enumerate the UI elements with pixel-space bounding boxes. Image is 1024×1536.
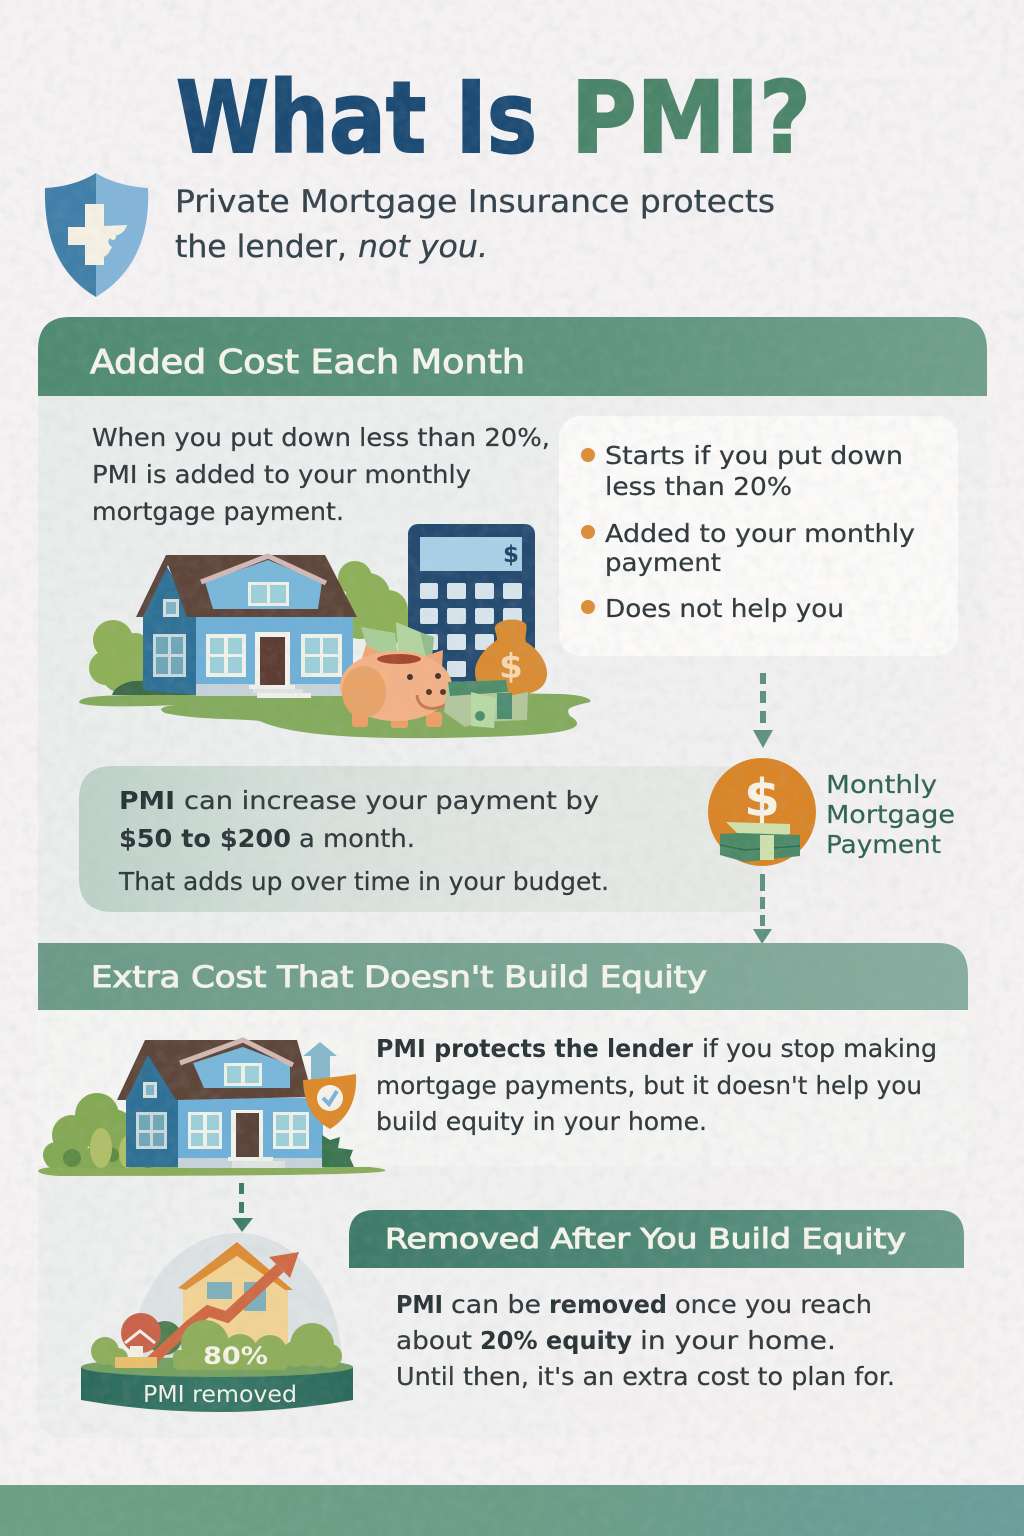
calculator: $ (503, 542, 519, 568)
callout: payment increase: That adds up over time in your budget. (118, 867, 609, 896)
callout: bullet list (559, 416, 958, 656)
right bush (336, 561, 414, 648)
heading bar: extra cost: Extra Cost That Doesn't Build Equity (91, 960, 707, 994)
icon: shield with cross (45, 173, 148, 297)
text block: when you put down: When you put down less than 20%, (92, 423, 550, 452)
illustration: house with shield (38, 1040, 385, 1176)
calculator (408, 524, 535, 694)
subtitle: the lender, (175, 229, 347, 265)
house (136, 555, 357, 698)
plank (115, 1357, 157, 1368)
callout: payment increase: $50 to $200 (119, 824, 291, 853)
text block: protects the lender: mortgage payments, but it doesn't help you (376, 1071, 922, 1100)
grass (79, 692, 590, 738)
label: monthly mortgage payment: Monthly (826, 770, 937, 799)
piggy bank (340, 645, 452, 728)
text block: when you put down: PMI is added to your monthly (92, 460, 471, 489)
heading bar: added cost each month (38, 317, 987, 396)
title: What Is (176, 61, 537, 176)
subtitle (175, 184, 775, 265)
heading bar: removed after (349, 1210, 964, 1268)
right plant (322, 1135, 354, 1167)
bullet: starts if: Starts if you put down (605, 441, 903, 470)
yellow house (178, 1242, 293, 1350)
growth arrow (150, 1252, 299, 1362)
panel: added cost each month (38, 317, 987, 944)
heading bar: added cost each month: Added Cost Each Month (90, 342, 525, 381)
dome (130, 1233, 342, 1365)
illustration: house, calculator, piggy bank, money (79, 524, 590, 738)
title (176, 61, 811, 176)
callout: payment increase: can increase your payment by (184, 786, 599, 815)
subtitle: not you. (358, 229, 488, 265)
text panel background (38, 1010, 968, 1166)
callout: payment increase (79, 766, 762, 912)
text block: can be removed: PMI (396, 1290, 443, 1319)
money bag (475, 620, 547, 695)
icon: monthly mortgage payment coin: $ (744, 769, 780, 829)
arrow: house to equity illustration (232, 1183, 253, 1232)
text block: can be removed: can be (451, 1290, 541, 1319)
text block: can be removed: removed (549, 1290, 667, 1319)
panel: main background (38, 317, 987, 1438)
text block: when you put down (92, 423, 550, 526)
text block: protects the lender: PMI protects the lender (376, 1034, 694, 1063)
callout: payment increase: PMI (119, 786, 175, 815)
subtitle: Private Mortgage Insurance protects (175, 184, 775, 220)
bushes (91, 1320, 342, 1370)
text block: can be removed (396, 1290, 895, 1391)
text block: can be removed: once you reach (675, 1290, 872, 1319)
bushes (43, 1093, 141, 1168)
label: monthly mortgage payment: Payment (826, 830, 941, 859)
label: monthly mortgage payment: Mortgage (826, 800, 955, 829)
bullet: does not help: Does not help you (605, 594, 844, 623)
heading bar: extra cost (38, 943, 968, 1010)
platform (81, 1357, 353, 1412)
arrow: coin to next section (753, 874, 772, 944)
bullet: added to payment (581, 519, 915, 577)
callout: payment increase: a month. (299, 824, 415, 853)
panel: extra cost that doesn't build equity (38, 943, 968, 1176)
left bush (89, 620, 153, 693)
text block: protects the lender: if you stop making (702, 1034, 937, 1063)
label: pmi removed: PMI removed (143, 1382, 297, 1408)
money bag: $ (499, 647, 523, 687)
icon: orange shield with check (303, 1074, 356, 1129)
bullet: starts if: less than 20% (605, 472, 792, 501)
house (117, 1040, 323, 1168)
dark bush (148, 1321, 182, 1355)
cash stack (444, 680, 528, 728)
panel: removed after you build equity (349, 1210, 964, 1391)
text block: when you put down: mortgage payment. (92, 497, 344, 526)
arrow: callout to coin (753, 673, 773, 748)
heading bar: removed after: Removed After You Build Equity (385, 1222, 906, 1255)
bills in piggy bank (361, 622, 434, 657)
label: 80 percent: 80% (203, 1342, 268, 1370)
small house behind (303, 1042, 337, 1080)
grass (38, 1167, 385, 1176)
bullet: added to payment: payment (605, 548, 721, 577)
red circle with small house (121, 1313, 161, 1358)
icon: monthly mortgage payment coin (708, 758, 816, 866)
title: PMI? (571, 61, 811, 176)
text block: protects the lender: build equity in your home. (376, 1107, 707, 1136)
bullet: added to payment: Added to your monthly (605, 519, 915, 548)
text block: protects the lender (376, 1034, 937, 1136)
text block: can be removed: Until then, it's an extra cost to plan for. (396, 1362, 895, 1391)
text block: can be removed: about (396, 1326, 472, 1355)
text block: can be removed: in your home. (640, 1326, 836, 1355)
footer band (0, 1485, 1024, 1536)
bullet: starts if (581, 441, 903, 501)
text block: can be removed: 20% equity (480, 1326, 632, 1355)
illustration: equity dome with 80 percent (81, 1233, 353, 1412)
label: monthly mortgage payment (826, 770, 955, 859)
